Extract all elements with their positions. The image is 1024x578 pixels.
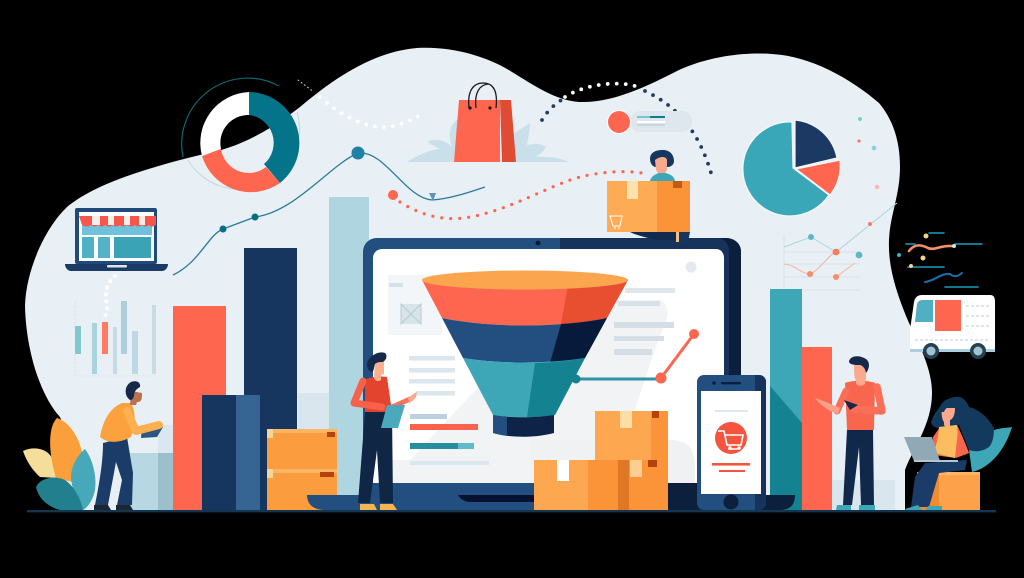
phone: [697, 375, 766, 510]
bag flower leaves: [407, 119, 569, 162]
dotted coral line: [388, 172, 642, 219]
outer arcs: [182, 78, 300, 189]
right bars: [770, 289, 895, 510]
sitting woman: [904, 397, 1012, 510]
plant: [23, 418, 95, 510]
funnel: [422, 270, 628, 437]
boxes center: [534, 411, 668, 510]
navy block: [202, 395, 260, 510]
orange leaf: [50, 418, 83, 482]
teal tier: [463, 358, 585, 417]
small bar chart: [75, 301, 156, 376]
growth line chart: [173, 146, 485, 275]
legs: [911, 460, 967, 507]
donut segments: [200, 92, 299, 192]
floating data lines: [897, 233, 982, 287]
person with tablet center: [354, 352, 417, 510]
person with phone right: [815, 356, 882, 510]
person with tablet left: [94, 381, 163, 510]
coral bar: [173, 306, 226, 510]
left background bars: [125, 197, 369, 510]
delivery van: [910, 295, 995, 359]
funnel rim: [422, 270, 628, 290]
funnel trend line: [572, 329, 699, 384]
laptop base: [307, 495, 795, 510]
hair: [931, 397, 994, 451]
coral tier: [422, 280, 628, 326]
shopping bag: [407, 83, 569, 162]
teal leaf: [71, 449, 95, 510]
small line chart: [784, 203, 897, 290]
armchair: [969, 427, 1012, 472]
dotted white curl: [104, 276, 115, 318]
woman with box on laptop: [607, 150, 690, 242]
navy bar: [244, 248, 297, 510]
navy tier: [442, 318, 607, 362]
dotted line white: [298, 80, 425, 127]
torso: [933, 425, 969, 458]
dark teal leaf: [36, 478, 83, 510]
main laptop: [307, 238, 795, 510]
scatter dots: [857, 117, 879, 189]
background blob: [25, 48, 932, 511]
laptop: [904, 437, 940, 461]
stacked boxes left: [267, 429, 337, 510]
donut chart: [182, 78, 300, 192]
cream leaf: [23, 448, 57, 478]
box seat: [917, 472, 980, 510]
neck: [493, 415, 554, 437]
cart icon: [715, 422, 747, 454]
ground line: [27, 510, 996, 512]
dotted arc: [542, 84, 713, 180]
stat pill: [607, 110, 692, 134]
screen content: [380, 262, 696, 483]
storefront laptop: [65, 208, 168, 271]
pie chart: [743, 120, 840, 216]
